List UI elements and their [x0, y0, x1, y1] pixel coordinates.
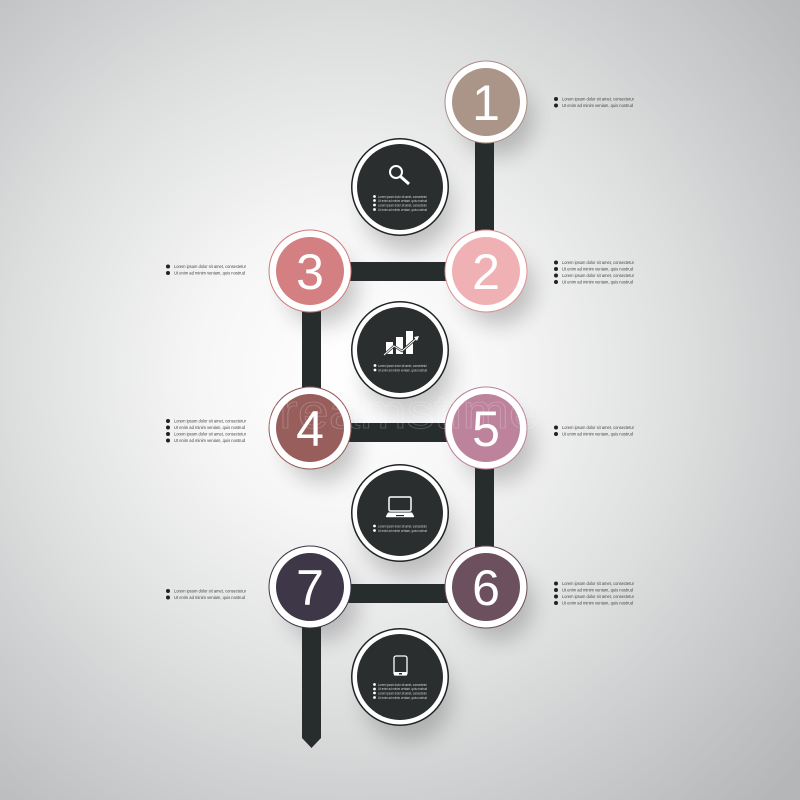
drop shadows	[286, 84, 534, 742]
text block: step 2: Lorem ipsum dolor sit amet, consectetur	[562, 273, 634, 278]
step 6: 6	[472, 560, 500, 616]
text block: step 7	[166, 588, 246, 600]
panel: laptop: Lorem ipsum dolor sit amet, consectetur	[378, 524, 428, 528]
panel: mobile	[351, 628, 449, 726]
text block: step 1: Ut enim ad minim veniam, quis nostrud	[562, 103, 634, 108]
text block: step 3: Ut enim ad minim veniam, quis nostrud	[174, 270, 246, 276]
panel: mobile: Lorem ipsum dolor sit amet, consectetur	[378, 683, 428, 687]
text block: step 7: Ut enim ad minim veniam, quis nostrud	[174, 595, 246, 600]
text block: step 4	[166, 418, 246, 443]
icon: magnifier	[390, 166, 409, 184]
panel: mobile: Lorem ipsum dolor sit amet, consectetur	[378, 692, 428, 696]
step 3: 3	[296, 244, 324, 300]
panel: search: Ut enim ad minim veniam, quis nostrud	[378, 199, 427, 203]
text block: step 2: Ut enim ad minim veniam, quis nostrud	[562, 280, 634, 284]
step 2	[445, 230, 527, 312]
panel: mobile: Ut enim ad minim veniam, quis nostrud	[378, 696, 427, 700]
text block: step 6: Ut enim ad minim veniam, quis nostrud	[562, 600, 634, 606]
icon: smartphone	[394, 656, 407, 676]
text block: step 6	[554, 581, 634, 606]
text block: step 5	[554, 425, 634, 436]
text block: step 2	[554, 260, 634, 284]
panel: mobile: Ut enim ad minim veniam, quis nostrud	[378, 687, 427, 691]
panel: chart: Lorem ipsum dolor sit amet, consectetur	[378, 364, 428, 368]
text block: step 1	[554, 96, 634, 108]
step 5: 5	[472, 401, 500, 457]
panel: search: Lorem ipsum dolor sit amet, consectetur	[378, 204, 428, 208]
step 2: 2	[472, 244, 500, 300]
step 3	[269, 230, 351, 312]
text block: step 2: Lorem ipsum dolor sit amet, consectetur	[562, 260, 634, 265]
step 6	[445, 546, 527, 628]
panel: laptop: Ut enim ad minim veniam, quis nostrud	[378, 529, 427, 533]
step 1: 1	[472, 75, 500, 131]
panel: search: Ut enim ad minim veniam, quis nostrud	[378, 208, 427, 212]
text block: step 5: Ut enim ad minim veniam, quis nostrud	[562, 432, 634, 436]
panel: search: Lorem ipsum dolor sit amet, consectetur	[378, 195, 428, 199]
text block: step 4: Ut enim ad minim veniam, quis nostrud	[174, 425, 246, 430]
icon: laptop	[386, 497, 414, 517]
step 4: 4	[296, 401, 324, 457]
connector path with arrow	[302, 135, 494, 748]
text block: step 6: Ut enim ad minim veniam, quis nostrud	[562, 588, 634, 592]
step 5	[445, 387, 527, 469]
text block: step 1: Lorem ipsum dolor sit amet, consectetur	[562, 96, 634, 102]
text block: step 4: Lorem ipsum dolor sit amet, consectetur	[174, 418, 246, 424]
text block: step 7: Lorem ipsum dolor sit amet, consectetur	[174, 588, 246, 594]
icon: bar chart with arrow	[384, 331, 419, 355]
text block: step 2: Ut enim ad minim veniam, quis nostrud	[562, 266, 634, 272]
panel: chart: Ut enim ad minim veniam, quis nostrud	[378, 368, 427, 372]
step 4	[269, 387, 351, 469]
text block: step 4: Lorem ipsum dolor sit amet, consectetur	[174, 432, 246, 436]
text block: step 6: Lorem ipsum dolor sit amet, consectetur	[562, 581, 634, 586]
text block: step 3: Lorem ipsum dolor sit amet, consectetur	[174, 264, 246, 269]
text block: step 5: Lorem ipsum dolor sit amet, consectetur	[562, 425, 634, 430]
text block: step 3	[166, 264, 246, 276]
text block: step 4: Ut enim ad minim veniam, quis nostrud	[174, 438, 246, 443]
step 7: 7	[296, 560, 324, 616]
panel: search	[351, 138, 449, 236]
text block: step 6: Lorem ipsum dolor sit amet, consectetur	[562, 594, 634, 599]
watermark: dreamstime	[248, 386, 540, 439]
step 7	[269, 546, 351, 628]
panel: chart	[351, 301, 449, 399]
step 1	[445, 61, 527, 143]
panel: laptop	[351, 464, 449, 562]
